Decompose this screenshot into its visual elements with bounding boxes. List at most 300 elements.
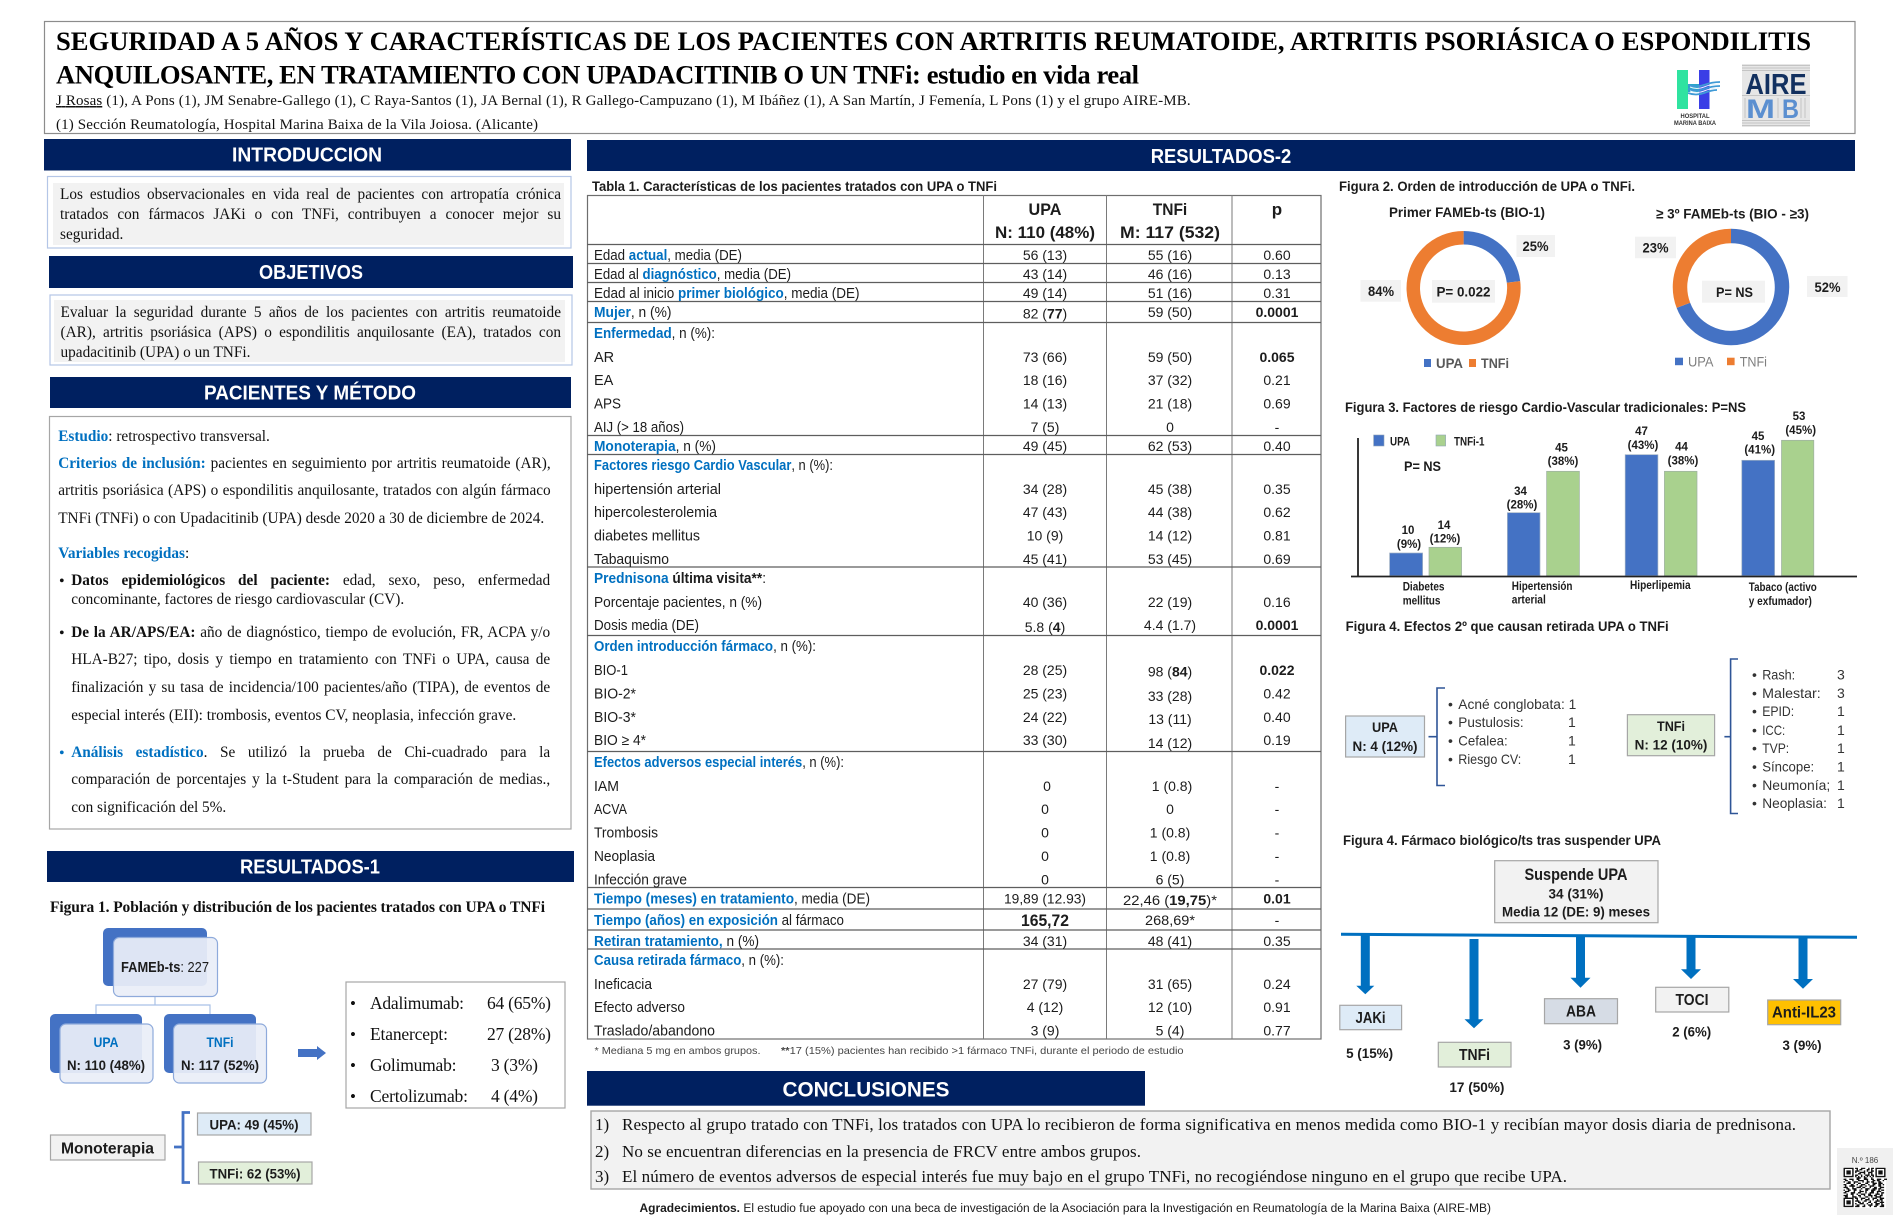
figure 4: efectos TNFi: 1 (1837, 722, 1845, 738)
table rows: tiempo y retirada: 165,72 (1021, 912, 1069, 930)
table rows: efectos adversos: - (1275, 801, 1280, 817)
bars: hiperlipemia: (43%) (1628, 440, 1659, 452)
figure 4: efectos TNFi: Malestar: (1762, 685, 1821, 701)
table caption: Tabla 1. Características de los pacientes tratados con UPA o TNFi (592, 178, 997, 194)
table rows: edad y mujer: 56 (13) (1023, 247, 1067, 263)
figure 4: efectos UPA: N: 4 (12%) (1352, 738, 1418, 754)
table rows: tiempo y retirada: 48 (41) (1148, 933, 1192, 949)
table rows: tiempo y retirada: 0.35 (1263, 933, 1291, 949)
table rows: factores riesgo CV: 14 (12) (1148, 528, 1192, 544)
text: criterios de inclusion: Criterios de inclusión: pacientes en seguimiento por artritis reumatoide (AR), (58, 455, 551, 472)
figure 2: donut BIO-1: P= 0.022 (1436, 284, 1491, 300)
figure 4: efectos TNFi: N: 12 (10%) (1635, 736, 1707, 752)
figure 1 title: Figura 1. Población y distribución de los pacientes tratados con UPA o TNFi (50, 899, 546, 916)
table rows: edad y mujer: Mujer, n (%) (594, 305, 672, 321)
box: ABA: ABA (1566, 1004, 1596, 1020)
table rows: enfermedad: 18 (16) (1023, 372, 1067, 388)
table rows: tiempo y retirada: 19,89 (12.93) (1004, 890, 1086, 906)
table rows: orden introduccion (594, 639, 1295, 751)
table rows: edad y mujer: Edad al diagnóstico, media (DE) (594, 267, 791, 283)
figure 4: efectos TNFi: Neumonía; (1762, 777, 1830, 793)
text: datos epidemiologicos: Datos epidemiológicos del paciente: edad, sexo, peso, enfermedad (71, 572, 550, 589)
table rows: orden introduccion: 98 (84) (1148, 664, 1192, 680)
table rows: causa retirada: 31 (65) (1148, 976, 1192, 992)
bars: hipertension: arterial (1512, 594, 1546, 606)
table rows: causa retirada: 5 (4) (1156, 1022, 1184, 1038)
panel: TNFi drug list: 4 (4%) (491, 1086, 538, 1106)
table rows: factores riesgo CV: 44 (38) (1148, 504, 1192, 520)
table rows: factores riesgo CV: 45 (41) (1023, 551, 1067, 567)
table rows: efectos adversos: 6 (5) (1156, 872, 1184, 888)
table rows: orden introduccion: BIO-1 (594, 663, 628, 679)
table rows: factores riesgo CV: 0.81 (1263, 528, 1291, 544)
text: de la AR/APS/EA: De la AR/APS/EA: año de diagnóstico, tiempo de evolución, FR, ACPA y/o (71, 624, 550, 640)
figure 4: efectos UPA: • (1448, 751, 1453, 767)
conclusion 1: Respecto al grupo tratado con TNFi, los tratados con UPA lo recibieron de forma significativa en menos medida como BIO-1 y recibían mayor dosis diaria de prednisona. (622, 1115, 1796, 1134)
box: JAKi: 5 (15%) (1346, 1045, 1393, 1061)
node: FAMEb-ts: FAMEb-ts: 227 (121, 960, 209, 976)
figure 2: donut BIO >=3: UPA (1688, 354, 1714, 370)
table rows: edad y mujer: 0.0001 (1256, 304, 1299, 320)
table header: TNFi (1153, 200, 1187, 219)
panel: introduccion: seguridad. (60, 226, 123, 243)
bars: hiperlipemia: (38%) (1668, 456, 1699, 468)
table rows: tiempo y retirada: Tiempo (meses) en tratamiento, media (DE) (594, 892, 870, 908)
figure 3: bar chart (1351, 411, 1857, 608)
table rows: causa retirada: 0.24 (1263, 976, 1291, 992)
table rows: enfermedad: 7 (5) (1031, 419, 1059, 435)
chart legend: UPA (1390, 436, 1410, 448)
table rows: efectos adversos: 0 (1041, 801, 1049, 817)
heading: PACIENTES Y METODO (50, 377, 571, 408)
table header: UPA (1028, 200, 1062, 219)
figure 4: efectos TNFi: TNFi (1657, 718, 1685, 734)
panel: TNFi drug list: 3 (3%) (491, 1055, 538, 1075)
table header: M: 117 (532) (1120, 223, 1220, 242)
table rows: causa retirada: 27 (79) (1023, 976, 1067, 992)
figure 4: efectos UPA: 1 (1568, 751, 1576, 767)
panel: objetivos: Evaluar la seguridad durante 5 años de los pacientes con artritis reumatoide (60, 304, 561, 321)
bars: diabetes: (12%) (1430, 534, 1461, 546)
table rows: enfermedad: 0 (1166, 419, 1174, 435)
table rows: efectos adversos: Neoplasia (594, 849, 656, 865)
table rows: factores riesgo CV: hipercolesterolemia (594, 505, 718, 521)
box: UPA monoterapia: UPA: 49 (45%) (210, 1116, 298, 1132)
figure 2: donut BIO-1: 84% (1368, 283, 1395, 299)
figure 4: efectos TNFi: EPID: (1762, 703, 1794, 719)
figure 2: donut BIO >=3 (1635, 206, 1848, 370)
arrow: Anti-IL23 (1793, 937, 1813, 989)
table rows: tiempo y retirada: 268,69* (1145, 912, 1196, 928)
figure 2: donut BIO-1: Primer FAMEb-ts (BIO-1) (1389, 204, 1545, 220)
heading: OBJETIVOS: OBJETIVOS (259, 262, 363, 284)
text: analisis estadistico (59, 738, 550, 816)
table rows: prednisona: 22 (19) (1148, 594, 1192, 610)
table rows: factores riesgo CV: 0.62 (1263, 504, 1291, 520)
box: Anti-IL23: Anti-IL23 (1772, 1004, 1836, 1022)
figure 4: efectos TNFi: • (1752, 795, 1757, 811)
table rows: edad y mujer: 43 (14) (1023, 266, 1067, 282)
node: UPA: N: 110 (48%) (67, 1057, 145, 1073)
bars: tabaco (1742, 411, 1817, 608)
figure 4: efectos TNFi: TVP: (1762, 740, 1789, 756)
bars: hiperlipemia (1625, 426, 1699, 592)
figure 4: efectos TNFi (1627, 659, 1845, 814)
figure 4: efectos TNFi: 1 (1837, 703, 1845, 719)
table rows: enfermedad: 37 (32) (1148, 372, 1192, 388)
table rows: efectos adversos: 1 (0.8) (1150, 824, 1190, 840)
figure 4: efectos TNFi: • (1752, 685, 1757, 701)
table footnotes (594, 1045, 1184, 1057)
table rows: efectos adversos: - (1275, 824, 1280, 840)
table 1 (587, 195, 1321, 1040)
table rows: causa retirada: Efecto adverso (594, 1000, 685, 1016)
panel: introduccion (48, 176, 571, 248)
logo: Hospital Marina Baixa: HOSPITAL (1680, 114, 1710, 120)
table rows: efectos adversos: IAM (594, 779, 619, 795)
bars: tabaco: 53 (1793, 411, 1805, 423)
bars: diabetes: (9%) (1397, 539, 1421, 551)
figure 2 title: Figura 2. Orden de introducción de UPA o TNFi. (1339, 178, 1635, 194)
table rows: edad y mujer: 55 (16) (1148, 247, 1192, 263)
table rows: factores riesgo CV: 34 (28) (1023, 481, 1067, 497)
table rows: orden introduccion: 14 (12) (1148, 735, 1192, 751)
bars: diabetes: 14 (1438, 520, 1451, 532)
table rows: factores riesgo CV: 45 (38) (1148, 481, 1192, 497)
table rows: factores riesgo CV: 53 (45) (1148, 551, 1192, 567)
table rows: enfermedad: 21 (18) (1148, 396, 1192, 412)
figure 4: efectos TNFi: • (1752, 777, 1757, 793)
panel: TNFi drug list: • (350, 1025, 356, 1044)
table rows: orden introduccion: Orden introducción fármaco, n (%): (594, 639, 816, 655)
logo: Hospital Marina Baixa (1674, 70, 1720, 127)
figure 4: efectos UPA: 1 (1568, 714, 1576, 730)
box: TOCI: 2 (6%) (1672, 1024, 1711, 1040)
table row: monoterapia: 62 (53) (1148, 438, 1192, 454)
table rows: edad y mujer: 51 (16) (1148, 285, 1192, 301)
table rows: edad y mujer: 0.31 (1263, 285, 1291, 301)
box: UPA monoterapia (198, 1113, 311, 1135)
bars: tabaco: (45%) (1785, 425, 1816, 437)
figure 4: efectos UPA: Cefalea: (1458, 732, 1508, 748)
table rows: causa retirada: 3 (9) (1031, 1022, 1059, 1038)
panel: TNFi drug list: Golimumab: (370, 1055, 456, 1075)
figure 4: efectos UPA: • (1448, 732, 1453, 748)
panel: TNFi drug list: Adalimumab: (370, 993, 464, 1013)
table rows: orden introduccion: 0.19 (1263, 732, 1291, 748)
box: ABA: 3 (9%) (1563, 1036, 1602, 1052)
table rows: factores riesgo CV: Factores riesgo Cardio Vascular, n (%): (594, 458, 833, 474)
table rows: efectos adversos: 1 (0.8) (1150, 848, 1190, 864)
table rows: causa retirada: Traslado/abandono (594, 1024, 715, 1040)
table rows: enfermedad: 0.69 (1263, 396, 1291, 412)
box: TNFi monoterapia (198, 1162, 312, 1184)
box: TNFi: 17 (50%) (1449, 1079, 1504, 1095)
figure 4: efectos UPA: Acné conglobata: 1 (1458, 696, 1577, 712)
heading: INTRODUCCION: INTRODUCCION (232, 144, 382, 166)
box: suspende UPA: Media 12 (DE: 9) meses (1502, 904, 1650, 920)
conclusion 3: 3) (595, 1167, 609, 1186)
figure 4: efectos TNFi: • (1752, 758, 1757, 774)
figure 4: efectos TNFi: • (1752, 666, 1757, 682)
figure 4: efectos UPA: 1 (1568, 732, 1576, 748)
heading: RESULTADOS-1: RESULTADOS-1 (240, 856, 380, 878)
table rows: edad y mujer: 59 (50) (1148, 304, 1192, 320)
bars: hiperlipemia: Hiperlipemia (1630, 580, 1691, 592)
table rows: enfermedad: 73 (66) (1023, 349, 1067, 365)
table rows: factores riesgo CV (594, 458, 1291, 568)
heading: RESULTADOS-2: RESULTADOS-2 (1151, 146, 1291, 168)
table rows: orden introduccion: 13 (11) (1148, 711, 1192, 727)
heading: RESULTADOS-1 (47, 851, 574, 882)
table rows: factores riesgo CV: hipertensión arterial (594, 482, 721, 498)
box: TOCI: TOCI (1676, 992, 1708, 1009)
figure 4: efectos UPA: • (1448, 696, 1453, 712)
figure 1: population tree (50, 928, 266, 1083)
QR block (1837, 1148, 1893, 1215)
node: TNFi (164, 1014, 266, 1083)
figure 4: efectos TNFi: 1 (1837, 795, 1845, 811)
figure 4 title: efectos: Figura 4. Efectos 2º que causan retirada UPA o TNFi (1346, 618, 1669, 634)
table rows: efectos adversos: 0 (1041, 872, 1049, 888)
table rows: efectos adversos: Infección grave (594, 872, 687, 888)
heading: OBJETIVOS (49, 256, 573, 288)
table rows: prednisona (594, 571, 1299, 635)
table rows: prednisona: 40 (36) (1023, 594, 1067, 610)
table rows: orden introduccion: 0.022 (1259, 662, 1295, 678)
figure 2: donut BIO >=3: P= NS (1716, 284, 1753, 300)
table rows: tiempo y retirada: 34 (31) (1023, 933, 1067, 949)
bars: hipertension: (28%) (1507, 500, 1538, 512)
panel: TNFi drug list (346, 982, 565, 1108)
node: UPA: UPA (94, 1034, 118, 1050)
table rows: factores riesgo CV: 0.35 (1263, 481, 1291, 497)
figure 4: efectos TNFi: 1 (1837, 758, 1845, 774)
table rows: efectos adversos: 0 (1166, 801, 1174, 817)
node: TNFi: N: 117 (52%) (181, 1057, 259, 1073)
box: TNFi (1438, 1042, 1511, 1095)
box: JAKi (1340, 1005, 1402, 1061)
panel: introduccion: Los estudios observacionales en vida real de pacientes con artropatía crónica (60, 186, 561, 203)
figure 4: efectos UPA: Pustulosis: (1458, 714, 1524, 730)
table rows: enfermedad: EA (594, 373, 614, 389)
panel: objetivos (50, 295, 572, 365)
figure 4: efectos TNFi: • (1752, 703, 1757, 719)
text: de la AR/APS/EA (59, 618, 550, 724)
bars: tabaco: y exfumador) (1749, 596, 1812, 608)
text: analisis estadistico: comparación de porcentajes y la t-Student para la comparación de medias., (71, 771, 550, 788)
node: UPA (50, 1014, 153, 1083)
figure 4: efectos TNFi: 3 (1837, 666, 1845, 682)
panel: TNFi drug list: • (350, 1087, 356, 1106)
table rows: efectos adversos: 1 (0.8) (1152, 778, 1192, 794)
bars: hipertension: 45 (1555, 442, 1568, 454)
table rows: edad y mujer: 0.13 (1263, 266, 1291, 282)
table row: monoterapia: 49 (45) (1023, 438, 1067, 454)
figure 2: donut BIO-1 (1360, 204, 1555, 371)
figure 2: donut BIO-1: TNFi (1481, 355, 1509, 371)
table rows: efectos adversos: Trombosis (594, 826, 658, 842)
figure 2: donut BIO-1: 25% (1522, 238, 1549, 254)
box: Anti-IL23: 3 (9%) (1782, 1037, 1822, 1053)
table rows: orden introduccion: BIO ≥ 4* (594, 733, 646, 749)
box: suspende UPA: Suspende UPA (1524, 866, 1628, 884)
bars: diabetes (1390, 520, 1462, 608)
table rows: edad y mujer: 49 (14) (1023, 285, 1067, 301)
table rows: factores riesgo CV: diabetes mellitus (594, 528, 700, 544)
title (56, 25, 1811, 90)
table rows: factores riesgo CV: Tabaquismo (594, 552, 669, 568)
figure 4: efectos TNFi: 1 (1837, 740, 1845, 756)
table rows: tiempo y retirada: 22,46 (19,75)* (1123, 892, 1218, 908)
acknowledgements: Agradecimientos. El estudio fue apoyado con una beca de investigación de la Asociación para la Investigación en Reumatología de la Marina Baixa (AIRE-MB) (640, 1203, 1491, 1215)
table rows: orden introduccion: BIO-2* (594, 686, 636, 702)
table rows: edad y mujer: Edad al inicio primer biológico, media (DE) (594, 286, 860, 302)
arrow: TNFi (1464, 939, 1484, 1028)
text: de la AR/APS/EA: HLA-B27; tipo, dosis y tiempo en tratamiento con TNFi o UPA, causa de (71, 651, 550, 668)
panel: objetivos: upadacitinib (UPA) o un TNFi. (60, 344, 250, 361)
box: JAKi: JAKi (1356, 1010, 1386, 1027)
text: estudio: Estudio: retrospectivo transversal. (58, 428, 270, 445)
arrow: JAKi (1356, 935, 1374, 994)
table rows: prednisona: Porcentaje pacientes, n (%) (594, 595, 762, 611)
table rows: orden introduccion: 33 (30) (1023, 732, 1067, 748)
table rows: efectos adversos: 0 (1041, 848, 1049, 864)
panel: TNFi drug list: Etanercept: (370, 1024, 448, 1044)
text: analisis estadistico: con significación del 5%. (71, 799, 226, 816)
table rows: causa retirada: 0.77 (1263, 1022, 1291, 1038)
table rows: orden introduccion: 33 (28) (1148, 688, 1192, 704)
table rows: efectos adversos: - (1275, 778, 1280, 794)
table header: p (1272, 200, 1282, 219)
table rows: orden introduccion: BIO-3* (594, 710, 636, 726)
table rows: orden introduccion: 28 (25) (1023, 662, 1067, 678)
bars: hipertension: Hipertensión (1512, 581, 1572, 593)
figure 4: efectos TNFi: Neoplasia: (1762, 795, 1827, 811)
table rows: orden introduccion: 0.40 (1263, 709, 1291, 725)
heading: PACIENTES Y METODO: PACIENTES Y MÉTODO (204, 382, 416, 404)
bars: diabetes: mellitus (1403, 596, 1440, 608)
node: TNFi: TNFi (206, 1034, 234, 1050)
table rows: efectos adversos: - (1275, 872, 1280, 888)
title: ANQUILOSANTE, EN TRATAMIENTO CON UPADACITINIB O UN TNFi: estudio en vida real (56, 60, 1139, 90)
arrow: ABA (1570, 936, 1590, 988)
bars: tabaco: 45 (1752, 431, 1765, 443)
table header: N: 110 (48%) (995, 223, 1095, 242)
bars: diabetes: Diabetes (1403, 582, 1444, 594)
node: FAMEb-ts (103, 928, 218, 996)
logo: AIRE-MB: B (1782, 94, 1799, 124)
table rows: causa retirada: 12 (10) (1148, 999, 1192, 1015)
monoterapia box (50, 1135, 165, 1160)
figure 4: efectos TNFi: • (1752, 740, 1757, 756)
table rows: tiempo y retirada: Retiran tratamiento, n (%) (594, 934, 759, 950)
panel: conclusiones (591, 1111, 1830, 1189)
table rows: efectos adversos: - (1275, 848, 1280, 864)
table rows: orden introduccion: 24 (22) (1023, 709, 1067, 725)
bars: hipertension (1507, 442, 1579, 606)
table rows: causa retirada: Causa retirada fármaco, n (%): (594, 953, 784, 969)
logo: AIRE-MB: AIRE (1746, 69, 1806, 101)
bars: tabaco: (41%) (1744, 444, 1775, 456)
figure 2: donut BIO-1: UPA (1436, 355, 1463, 371)
table rows: prednisona: 0.16 (1263, 594, 1291, 610)
box: suspende UPA (1495, 861, 1658, 923)
bars: hiperlipemia: 44 (1675, 442, 1688, 454)
table rows: efectos adversos: 0 (1043, 778, 1051, 794)
figure 4: efectos TNFi: • (1752, 722, 1757, 738)
affiliation: (1) Sección Reumatología, Hospital Marina Baixa de la Vila Joiosa. (Alicante) (56, 117, 538, 133)
table rows: tiempo y retirada: - (1275, 912, 1280, 928)
text: datos epidemiologicos (59, 571, 550, 608)
panel: TNFi drug list: 27 (28%) (487, 1024, 551, 1044)
monoterapia box: Monoterapia (61, 1140, 154, 1158)
table rows: enfermedad: - (1275, 419, 1280, 435)
table rows: factores riesgo CV: 47 (43) (1023, 504, 1067, 520)
table rows: efectos adversos (594, 755, 1280, 888)
conclusion 2: No se encuentran diferencias en la presencia de FRCV entre ambos grupos. (622, 1142, 1141, 1161)
text: variables recogidas: Variables recogidas: (58, 545, 189, 562)
box: TNFi monoterapia: TNFi: 62 (53%) (210, 1166, 300, 1182)
table rows: enfermedad: APS (594, 396, 621, 412)
table rows: tiempo y retirada: 0.01 (1263, 890, 1291, 906)
table header (995, 200, 1282, 242)
table rows: edad y mujer: 0.60 (1263, 247, 1291, 263)
text: datos epidemiologicos: • (59, 573, 65, 590)
panel: TNFi drug list: 64 (65%) (487, 993, 551, 1013)
text: criterios de inclusion (58, 450, 551, 527)
table rows: edad y mujer: 46 (16) (1148, 266, 1192, 282)
table rows: causa retirada (594, 953, 1291, 1040)
panel: TNFi drug list: Certolizumab: (370, 1086, 468, 1106)
chart legend (1374, 435, 1485, 448)
figure 4: efectos TNFi: 1 (1837, 777, 1845, 793)
table rows: enfermedad: AIJ (> 18 años) (594, 420, 684, 436)
panel: TNFi drug list: • (350, 1056, 356, 1075)
heading: INTRODUCCION (44, 139, 571, 170)
figure 2: donut BIO >=3: TNFi (1740, 354, 1767, 370)
bars: diabetes: 10 (1402, 525, 1414, 537)
table rows: prednisona: 0.0001 (1256, 617, 1299, 633)
table rows: enfermedad: 0.065 (1259, 349, 1295, 365)
figure 4: efectos TNFi: ICC: (1762, 722, 1785, 738)
conclusion 3: El número de eventos adversos de especial interés fue muy bajo en el grupo TNFi, no recogiéndose ninguno en el grupo que recibe UPA. (622, 1167, 1567, 1186)
text: de la AR/APS/EA: • (59, 625, 65, 642)
table rows: orden introduccion: 0.42 (1263, 686, 1291, 702)
header panel (44, 22, 1855, 134)
figure 2: donut BIO >=3: ≥ 3º FAMEb-ts (BIO - ≥3) (1656, 206, 1809, 222)
table footnotes: **17 (15%) pacientes han recibido >1 fármaco TNFi, durante el periodo de estudio (781, 1045, 1184, 1057)
table rows: prednisona: Prednisona última visita**: (594, 571, 766, 587)
heading: CONCLUSIONES: CONCLUSIONES (782, 1078, 950, 1102)
table row: monoterapia: 0.40 (1263, 438, 1291, 454)
table rows: causa retirada: 0.91 (1263, 999, 1291, 1015)
table rows: efectos adversos: Efectos adversos especial interés, n (%): (594, 755, 844, 771)
figure 4 title: farmaco: Figura 4. Fármaco biológico/ts tras suspender UPA (1343, 832, 1661, 848)
table rows: tiempo y retirada (594, 890, 1291, 950)
table rows: prednisona: 5.8 (4) (1025, 619, 1065, 635)
text: criterios de inclusion: artritis psoriásica (APS) o espondilitis anquilosante, tratados con algún fármaco (58, 482, 551, 499)
arrow: TOCI (1681, 937, 1701, 979)
logo: AIRE-MB (1742, 64, 1810, 127)
table rows: enfermedad: 59 (50) (1148, 349, 1192, 365)
figure 4: efectos UPA: • (1448, 714, 1453, 730)
box: Anti-IL23 (1768, 1000, 1841, 1053)
heading: RESULTADOS-2 (587, 140, 1855, 171)
table footnotes: * Mediana 5 mg en ambos grupos. (594, 1045, 760, 1057)
table rows: factores riesgo CV: 10 (9) (1027, 528, 1063, 544)
table rows: enfermedad: Enfermedad, n (%): (594, 326, 715, 342)
